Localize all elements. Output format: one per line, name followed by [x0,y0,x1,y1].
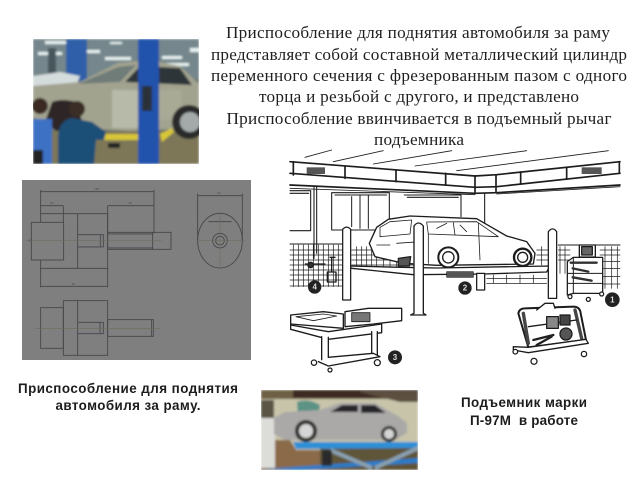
heading text block [211,23,627,149]
number badges [308,280,620,364]
diagnostic stand with monitor [567,245,604,301]
illustration: P-97M lift workshop [290,150,620,372]
technical drawing of the lifting fixture: 60 [217,191,221,195]
photo: car on blue lift with mechanics [32,39,206,164]
caption: fixture: автомобиля за раму. [56,398,200,413]
wall tiles [290,245,620,288]
heading text block: подъемника [374,130,464,149]
caption: fixture: Приспособление для поднятия [18,381,238,396]
side circle view [197,193,245,268]
caption: lift model: П-97М в работе [470,413,578,428]
ceiling beams and pipes [290,150,620,195]
caption: fixture [18,381,238,413]
heading text block: представляет собой составной металлический цилиндр [211,45,627,64]
bottom view part [35,301,160,355]
technical drawing of the lifting fixture: 90 [72,282,75,286]
technical drawing of the lifting fixture: 30 [50,201,54,205]
technical drawing of the lifting fixture [22,180,251,360]
number badges: 1 [610,296,615,305]
equipment table with trays [291,308,402,372]
windows and wall [290,187,620,258]
car on the lift [369,216,535,267]
lift posts [343,223,557,315]
heading text block: Приспособление ввинчивается в подъемный рычаг [226,109,612,128]
technical drawing of the lifting fixture: 60 [129,201,132,205]
hydraulic cart [513,303,588,364]
heading text block: торца и резьбой с другого, и представлено [259,87,579,106]
technical drawing of the lifting fixture: 30 [28,239,32,243]
lift platform [348,266,550,290]
top view part [25,190,171,287]
pneumatic unit on the wall [305,257,336,282]
heading text block: переменного сечения с фрезерованным пазом с одного [211,66,627,85]
number badges: 4 [312,283,317,292]
heading text block: Приспособление для поднятия автомобиля за раму [226,23,610,42]
caption: lift model: Подъемник марки [461,395,587,410]
caption: lift model [461,395,587,428]
number badges: 3 [393,353,398,362]
number badges: 2 [463,284,468,293]
photo: silver sedan on blue scissor lift [261,390,418,470]
technical drawing of the lifting fixture: 120 [94,187,99,191]
